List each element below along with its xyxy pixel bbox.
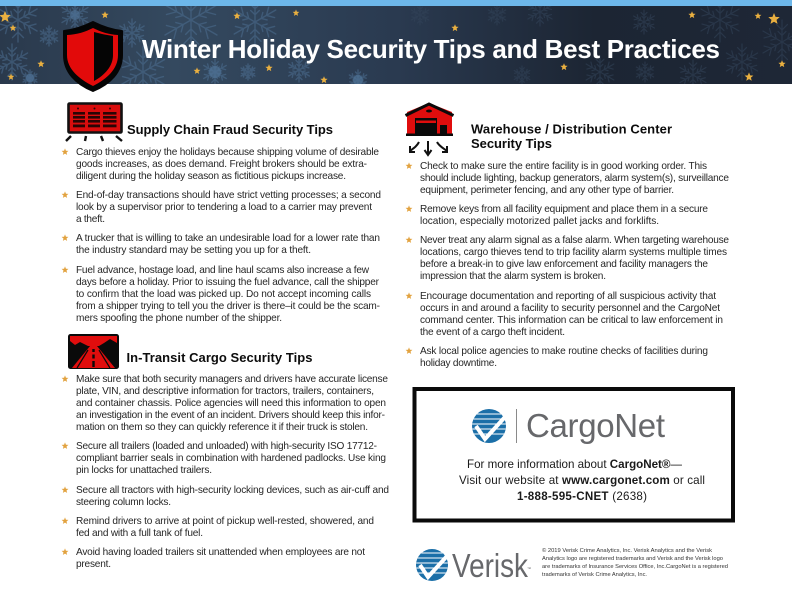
contact text: Visit our website at www.cargonet.com or call <box>459 474 705 487</box>
tip: working order: equipment, perimeter fencing, and any other type of barrier. <box>420 185 674 196</box>
tip: cargo thieves: goods increases, as does demand. Freight brokers should be extra- <box>76 159 367 170</box>
tip: unattended trailers: Avoid having loaded trailers sit unattended when employees are not <box>76 547 365 558</box>
panel: in-transit tips <box>62 334 389 570</box>
tip: license plate: an investigation in the event of an incident. Drivers should keep this infor- <box>76 410 385 421</box>
icon: road <box>68 334 119 369</box>
tip: secure trailers: pin locks for unattached trailers. <box>76 465 212 476</box>
logo: verisk: ™ <box>527 566 531 571</box>
tip: undesirable load <box>62 233 380 256</box>
tip: end-of-day: a theft. <box>76 214 105 225</box>
header banner <box>0 0 792 84</box>
tip: police checks: Ask local police agencies to make routine checks of facilities during <box>420 346 708 357</box>
tip: secure tractors: Secure all tractors with high-security locking devices, such as air-cuff and <box>76 485 389 496</box>
icon: cargo container <box>66 104 122 141</box>
tip: police checks: holiday downtime. <box>420 358 497 369</box>
divider <box>516 409 517 443</box>
tip: secure trailers: Secure all trailers (loaded and unloaded) with high-security ISO 17712- <box>76 441 377 452</box>
heading: warehouse <box>471 122 672 151</box>
tip: false alarm: impression that the alarm system is broken. <box>420 271 606 282</box>
logo: verisk: Verisk <box>452 547 528 584</box>
tip: working order: should include lighting, backup generators, alarm system(s), surveillance <box>420 173 729 184</box>
tip: well-rested drivers <box>62 516 374 539</box>
tip: license plate: Make sure that both security managers and drivers have accurate license <box>76 374 388 385</box>
panel: warehouse tips <box>406 103 729 369</box>
tip: end-of-day <box>62 190 381 225</box>
tip: documentation <box>406 291 723 338</box>
contact text <box>459 458 705 503</box>
copyright text: trademarks of Verisk Crime Analytics, Inc. <box>542 572 647 578</box>
copyright text: © 2019 Verisk Crime Analytics, Inc. Verisk Analytics and the Verisk <box>542 547 712 554</box>
callout: cargonet contact box <box>414 389 733 520</box>
tip: fuel advance: from a shipper trying to tell you the driver is there–it could be the scam- <box>76 301 380 312</box>
tip: license plate <box>62 374 388 433</box>
tip: fuel advance: Fuel advance, hostage load, and line haul scams also increase a few <box>76 265 370 276</box>
copyright text: Analytics logo are registered trademarks and Verisk and the Verisk logo <box>542 556 723 562</box>
contact text: For more information about CargoNet®— <box>467 458 682 471</box>
tip: secure tractors <box>62 485 389 508</box>
contact text: 1-888-595-CNET (2638) <box>517 490 647 503</box>
tip: license plate: and container chassis. Police agencies will need this information to open <box>76 398 386 409</box>
tip: documentation: occurs in and around a facility to security personnel and the CargoNet <box>420 303 720 314</box>
tip: false alarm: locations, cargo thieves tend to trip facility alarm systems multiple times <box>420 247 727 258</box>
tip: cargo thieves: diligent during the holiday season as fictitious pickups increase. <box>76 171 346 182</box>
tip: unattended trailers: present. <box>76 559 111 570</box>
icon: shield <box>64 22 122 91</box>
tip: remove keys <box>406 204 708 227</box>
tip: end-of-day: End-of-day transactions should have strict vetting processes; a second <box>76 190 381 201</box>
tip: secure tractors: steering column locks. <box>76 497 171 508</box>
tip: documentation: command center. This information can be critical to law enforcement in <box>420 315 723 326</box>
tip: end-of-day: look by a supervisor prior to tendering a load to a carrier may prevent <box>76 202 372 213</box>
tip: documentation: the event of a cargo theft incident. <box>420 327 565 338</box>
tip: cargo thieves: Cargo thieves enjoy the holidays because shipping volume of desirable <box>76 147 379 158</box>
tip: working order <box>406 161 729 196</box>
tip: unattended trailers <box>62 547 365 570</box>
tip: license plate: plate, VIN, and descriptive information for tractors, trailers, containers, <box>76 386 374 397</box>
heading: supply chain: Supply Chain Fraud Security Tips <box>127 122 333 137</box>
tip: false alarm: Never treat any alarm signal as a false alarm. When targeting warehouse <box>420 235 729 246</box>
tip: false alarm <box>406 235 729 282</box>
title: Winter Holiday Security Tips and Best Practices <box>142 34 720 64</box>
copyright text: are trademarks of Insurance Services Office, Inc.CargoNet is a registered <box>542 564 728 570</box>
tip: fuel advance: to confirm that the load was picked up. Do not accept incoming calls <box>76 289 371 300</box>
logo: cargonet wordmark: CargoNet <box>526 407 665 444</box>
icon: warehouse <box>406 103 454 155</box>
heading: warehouse: Security Tips <box>471 136 552 151</box>
logo: cargonet globe <box>472 409 506 443</box>
logo: verisk <box>416 549 531 581</box>
tip: well-rested drivers: fed and with a full tank of fuel. <box>76 528 203 539</box>
tip: well-rested drivers: Remind drivers to arrive at point of pickup well-rested, showered, and <box>76 516 374 527</box>
tip: cargo thieves <box>62 147 379 182</box>
tip: secure trailers: compliant barrier seals in combination with hardened padlocks. Use king <box>76 453 386 464</box>
tip: remove keys: location, especially motorized pallet jacks and forklifts. <box>420 216 659 227</box>
tip: remove keys: Remove keys from all facility equipment and place them in a secure <box>420 204 708 215</box>
panel: supply chain fraud tips <box>62 104 381 324</box>
tip: fuel advance: mers spoofing the phone number of the shipper. <box>76 313 282 324</box>
tip: undesirable load: the industry standard may be setting you up for a theft. <box>76 245 311 256</box>
heading: warehouse: Warehouse / Distribution Center <box>471 122 672 136</box>
copyright text <box>542 547 728 578</box>
tip: working order: Check to make sure the entire facility is in good working order. This <box>420 161 707 172</box>
tip: fuel advance <box>62 265 380 324</box>
tip: secure trailers <box>62 441 386 476</box>
tip: false alarm: before a break-in to give law enforcement and facility managers the <box>420 259 708 270</box>
tip: documentation: Encourage documentation and reporting of all suspicious activity that <box>420 291 716 302</box>
tip: police checks <box>406 346 708 369</box>
tip: fuel advance: days before a holiday. Prior to issuing the fuel advance, call the shipper <box>76 277 380 288</box>
heading: in-transit: In-Transit Cargo Security Tips <box>126 350 312 365</box>
tip: undesirable load: A trucker that is willing to take an undesirable load for a lower rate than <box>76 233 380 244</box>
tip: license plate: mation on them so they can quickly reference it if their truck is stolen. <box>76 422 368 433</box>
